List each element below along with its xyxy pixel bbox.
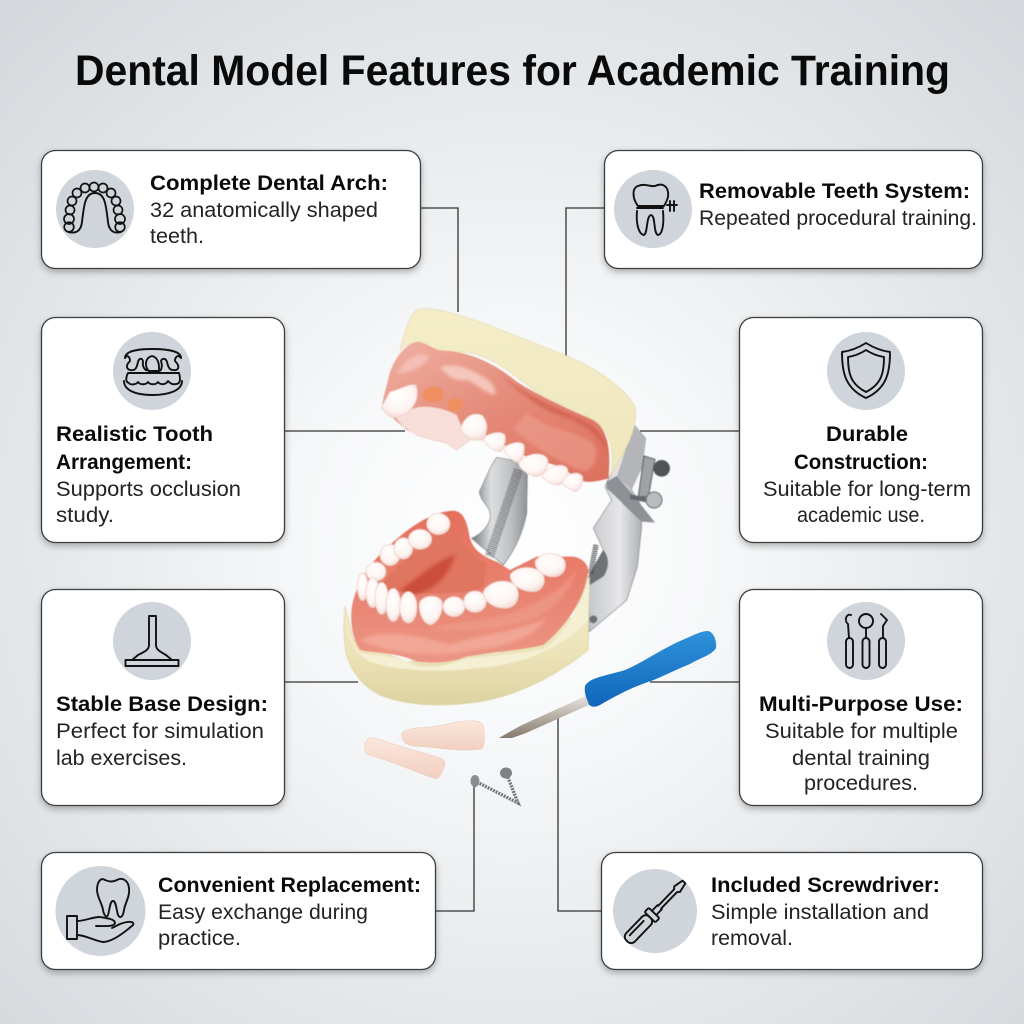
panel: Stable Base Design <box>42 590 284 806</box>
text: Removable Teeth System: Removable Teeth System: <box>699 179 970 203</box>
icon: removable tooth <box>634 185 677 235</box>
icon: front teeth <box>124 349 182 395</box>
text: Stable Base Design: Stable Base Design: <box>56 692 268 716</box>
upper gum <box>382 342 609 482</box>
text: Durable Construction: academic use. <box>797 503 925 527</box>
panel: Multi-Purpose Use <box>740 590 982 806</box>
text: Stable Base Design: lab exercises. <box>56 746 187 770</box>
text: Included Screwdriver: Included Screwdriver: <box>711 873 940 897</box>
text: Convenient Replacement: practice. <box>158 926 241 950</box>
text: Multi-Purpose Use: Multi-Purpose Use: <box>759 692 963 716</box>
text: Removable Teeth System: Repeated procedural training. <box>699 206 977 230</box>
illustration: blue screwdriver <box>499 631 716 738</box>
text: Convenient Replacement: Easy exchange during <box>158 900 368 924</box>
connector lines <box>285 208 739 911</box>
text: Multi-Purpose Use: Suitable for multiple <box>765 719 958 743</box>
text: Multi-Purpose Use <box>759 692 963 795</box>
metal side arm <box>588 426 670 632</box>
panel: Convenient Replacement <box>42 852 436 970</box>
icon: shield <box>842 343 890 398</box>
text: Included Screwdriver: Simple installation and <box>711 900 929 924</box>
screwdriver handle <box>585 631 716 707</box>
text: Included Screwdriver: removal. <box>711 926 793 950</box>
panel: Realistic Tooth Arrangement <box>42 318 284 542</box>
screwdriver shaft <box>499 695 591 738</box>
upper jaw base <box>400 309 636 477</box>
text: Removable Teeth System <box>699 179 977 230</box>
panel: Removable Teeth System <box>604 150 982 268</box>
text: Complete Dental Arch: 32 anatomically shaped <box>150 198 378 222</box>
icon: dental tools <box>846 614 887 668</box>
panel: Durable Construction <box>740 318 982 542</box>
loose replacement teeth <box>365 721 484 778</box>
text: Durable Construction <box>763 422 971 527</box>
lower base front rim <box>345 577 589 671</box>
text: Durable Construction: Construction: <box>794 450 928 474</box>
upper teeth <box>382 385 583 492</box>
lower gum <box>351 511 588 663</box>
title: Dental Model Features for Academic Training <box>75 47 950 95</box>
lower teeth <box>357 513 565 625</box>
lower jaw base <box>344 577 589 705</box>
panel: Complete Dental Arch <box>42 150 420 268</box>
lower gum floor and shine <box>360 527 577 654</box>
text: Convenient Replacement: Convenient Replacement: <box>158 873 421 897</box>
text: Realistic Tooth Arrangement: Realistic Tooth <box>56 422 213 446</box>
text: Stable Base Design <box>56 692 268 770</box>
icon: hand holding tooth <box>67 879 133 942</box>
loose screws <box>470 768 518 803</box>
text: Stable Base Design: Perfect for simulation <box>56 719 264 743</box>
text: Convenient Replacement <box>158 873 421 950</box>
upper gum sockets and shine <box>397 354 608 472</box>
icon: dental arch <box>64 182 125 233</box>
icon: stable base stand <box>126 616 178 666</box>
icon: screwdriver <box>622 877 689 946</box>
text: Complete Dental Arch <box>150 171 388 248</box>
metal hinge post <box>472 457 527 565</box>
text: Realistic Tooth Arrangement: Supports occlusion <box>56 477 241 501</box>
text: Realistic Tooth Arrangement: study. <box>56 503 114 527</box>
text: Multi-Purpose Use: dental training <box>792 746 930 770</box>
text: Durable Construction: Durable <box>826 422 908 446</box>
text: Complete Dental Arch: Complete Dental Arch: <box>150 171 388 195</box>
panel: Included Screwdriver <box>602 852 982 970</box>
text: Realistic Tooth Arrangement: Arrangement: <box>56 450 192 474</box>
illustration: dental jaw model <box>344 309 670 705</box>
text: Complete Dental Arch: teeth. <box>150 224 204 248</box>
text: Multi-Purpose Use: procedures. <box>804 771 918 795</box>
text: Durable Construction: Suitable for long-term <box>763 477 971 501</box>
text: Included Screwdriver <box>711 873 940 950</box>
text: Realistic Tooth Arrangement <box>56 422 241 527</box>
